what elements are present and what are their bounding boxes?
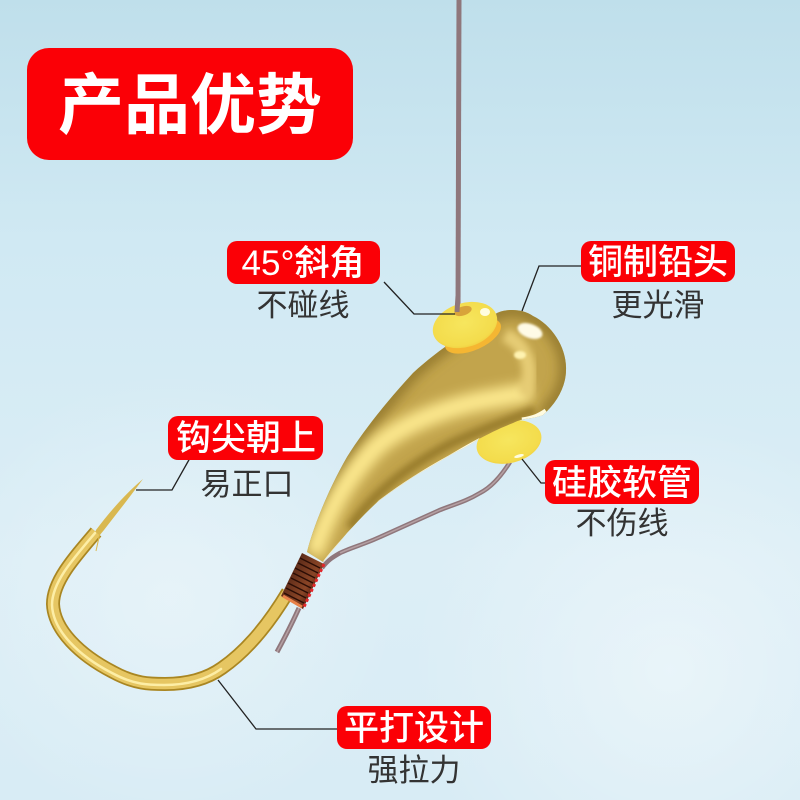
silicone bead upper — [427, 294, 506, 361]
callout: silicone tube: 不伤线 — [576, 506, 668, 541]
callout: hook tip: 钩尖朝上 — [176, 419, 316, 458]
callout: copper head: 铜制铅头 — [588, 243, 728, 282]
fishing line — [277, 0, 510, 652]
callout: silicone tube: 硅胶软管 — [552, 464, 692, 503]
hook — [52, 479, 288, 685]
silicone bead lower — [472, 414, 546, 470]
callout: copper head: 更光滑 — [612, 288, 704, 323]
callout: flat forged design — [218, 680, 491, 788]
callout: silicone tube — [522, 459, 699, 541]
lead weight — [307, 310, 566, 562]
callout: 45 degree angle — [227, 241, 455, 323]
callout: hook tip — [136, 416, 323, 502]
thread wrap — [281, 553, 324, 609]
callout: hook tip: 易正口 — [200, 467, 294, 502]
title badge: 产品优势 — [58, 68, 322, 142]
callout: 45 degree angle: 45°斜角 — [242, 244, 364, 283]
callout: flat forged design: 强拉力 — [368, 753, 460, 788]
title badge — [27, 48, 353, 160]
callout: copper head — [522, 241, 735, 323]
callout: flat forged design: 平打设计 — [344, 709, 484, 748]
callout: 45 degree angle: 不碰线 — [256, 288, 350, 323]
